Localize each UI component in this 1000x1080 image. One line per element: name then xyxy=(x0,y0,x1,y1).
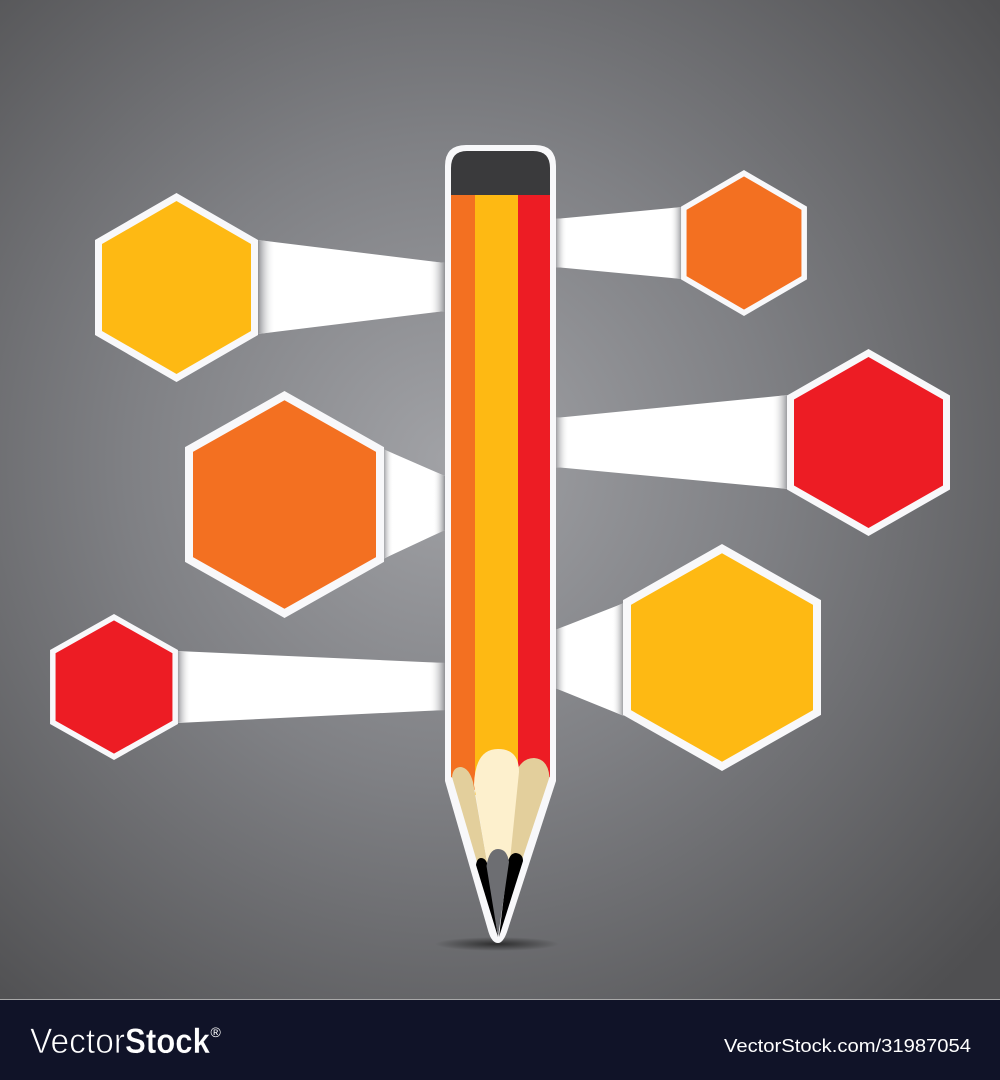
hexagon: red middle right xyxy=(790,353,946,532)
lead: right black xyxy=(499,853,523,937)
logo: VectorStock: Stock xyxy=(125,1022,210,1061)
stripe: red xyxy=(518,195,550,790)
footer bar xyxy=(0,999,1000,1080)
lead: center grey xyxy=(486,849,509,937)
hexagon: yellow upper left xyxy=(98,197,254,378)
hexagon: yellow lower right xyxy=(627,549,817,766)
hexagon: orange upper right xyxy=(684,173,804,313)
lead: left black xyxy=(476,858,498,937)
eraser xyxy=(451,151,550,195)
ribbon: middle left xyxy=(383,449,445,559)
logo: VectorStock: ® xyxy=(210,1024,222,1040)
ribbon: middle right xyxy=(555,395,788,489)
stripe: yellow xyxy=(475,195,518,795)
hexagon: orange middle left xyxy=(189,396,380,613)
hexagon: red lower left xyxy=(53,617,175,757)
stripe: orange xyxy=(451,195,475,790)
wood: right facet xyxy=(509,758,550,860)
logo: VectorStock xyxy=(30,1022,222,1061)
wood: center facet xyxy=(474,749,519,862)
pencil xyxy=(445,145,556,943)
ribbon: lower right xyxy=(555,603,624,716)
pencil shadow xyxy=(435,937,559,951)
logo: VectorStock: Vector xyxy=(30,1022,125,1061)
ribbon: upper right xyxy=(555,207,682,279)
ribbon: upper left xyxy=(258,240,445,334)
pencil outline xyxy=(445,145,556,943)
ribbon: lower left xyxy=(177,651,445,723)
image id text: VectorStock.com/31987054 xyxy=(724,1035,971,1056)
wood: left facet xyxy=(452,767,487,862)
